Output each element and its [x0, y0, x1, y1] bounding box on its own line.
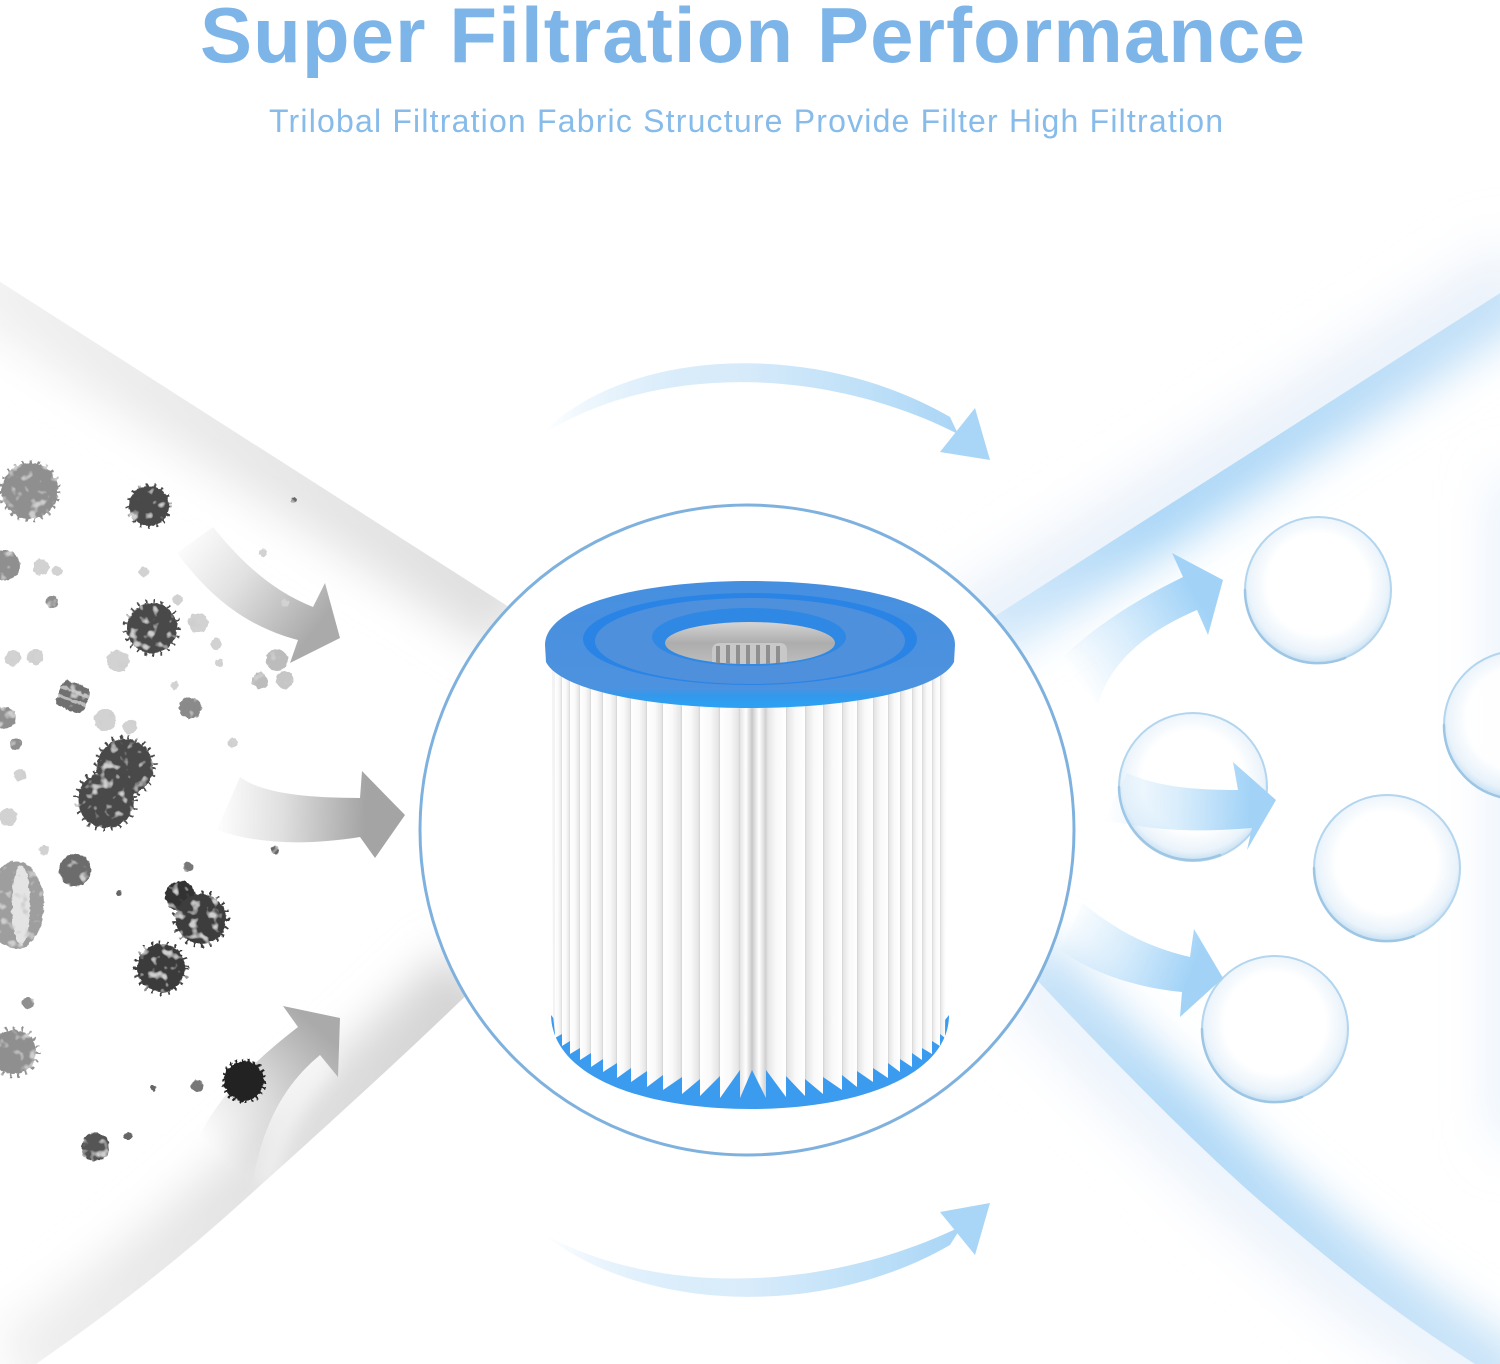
background: grey dirty-water band [0, 269, 520, 1364]
circle frame [420, 505, 1074, 1155]
bubbles [1119, 517, 1500, 1102]
arrow: grey upper [177, 527, 340, 663]
arrow: top arc [540, 363, 990, 460]
filter cartridge [545, 581, 955, 1109]
filter pleats [552, 670, 948, 1098]
subtitle: Trilobal Filtration Fabric Structure Provide Filter High Filtration [269, 103, 1223, 139]
background: blue clean-water band [900, 274, 1500, 1364]
dirt particles [0, 462, 297, 1161]
filter top cap [545, 581, 955, 708]
arrow: blue middle [1105, 762, 1276, 850]
dirt particle: black blob [223, 1060, 265, 1102]
filter base [551, 1015, 949, 1109]
arrow: grey lower [200, 1006, 340, 1186]
arrow: grey middle [217, 771, 405, 858]
arrow: blue upper [1060, 553, 1223, 705]
arrow: blue lower [1060, 903, 1223, 1017]
arrow: bottom arc [540, 1203, 990, 1297]
